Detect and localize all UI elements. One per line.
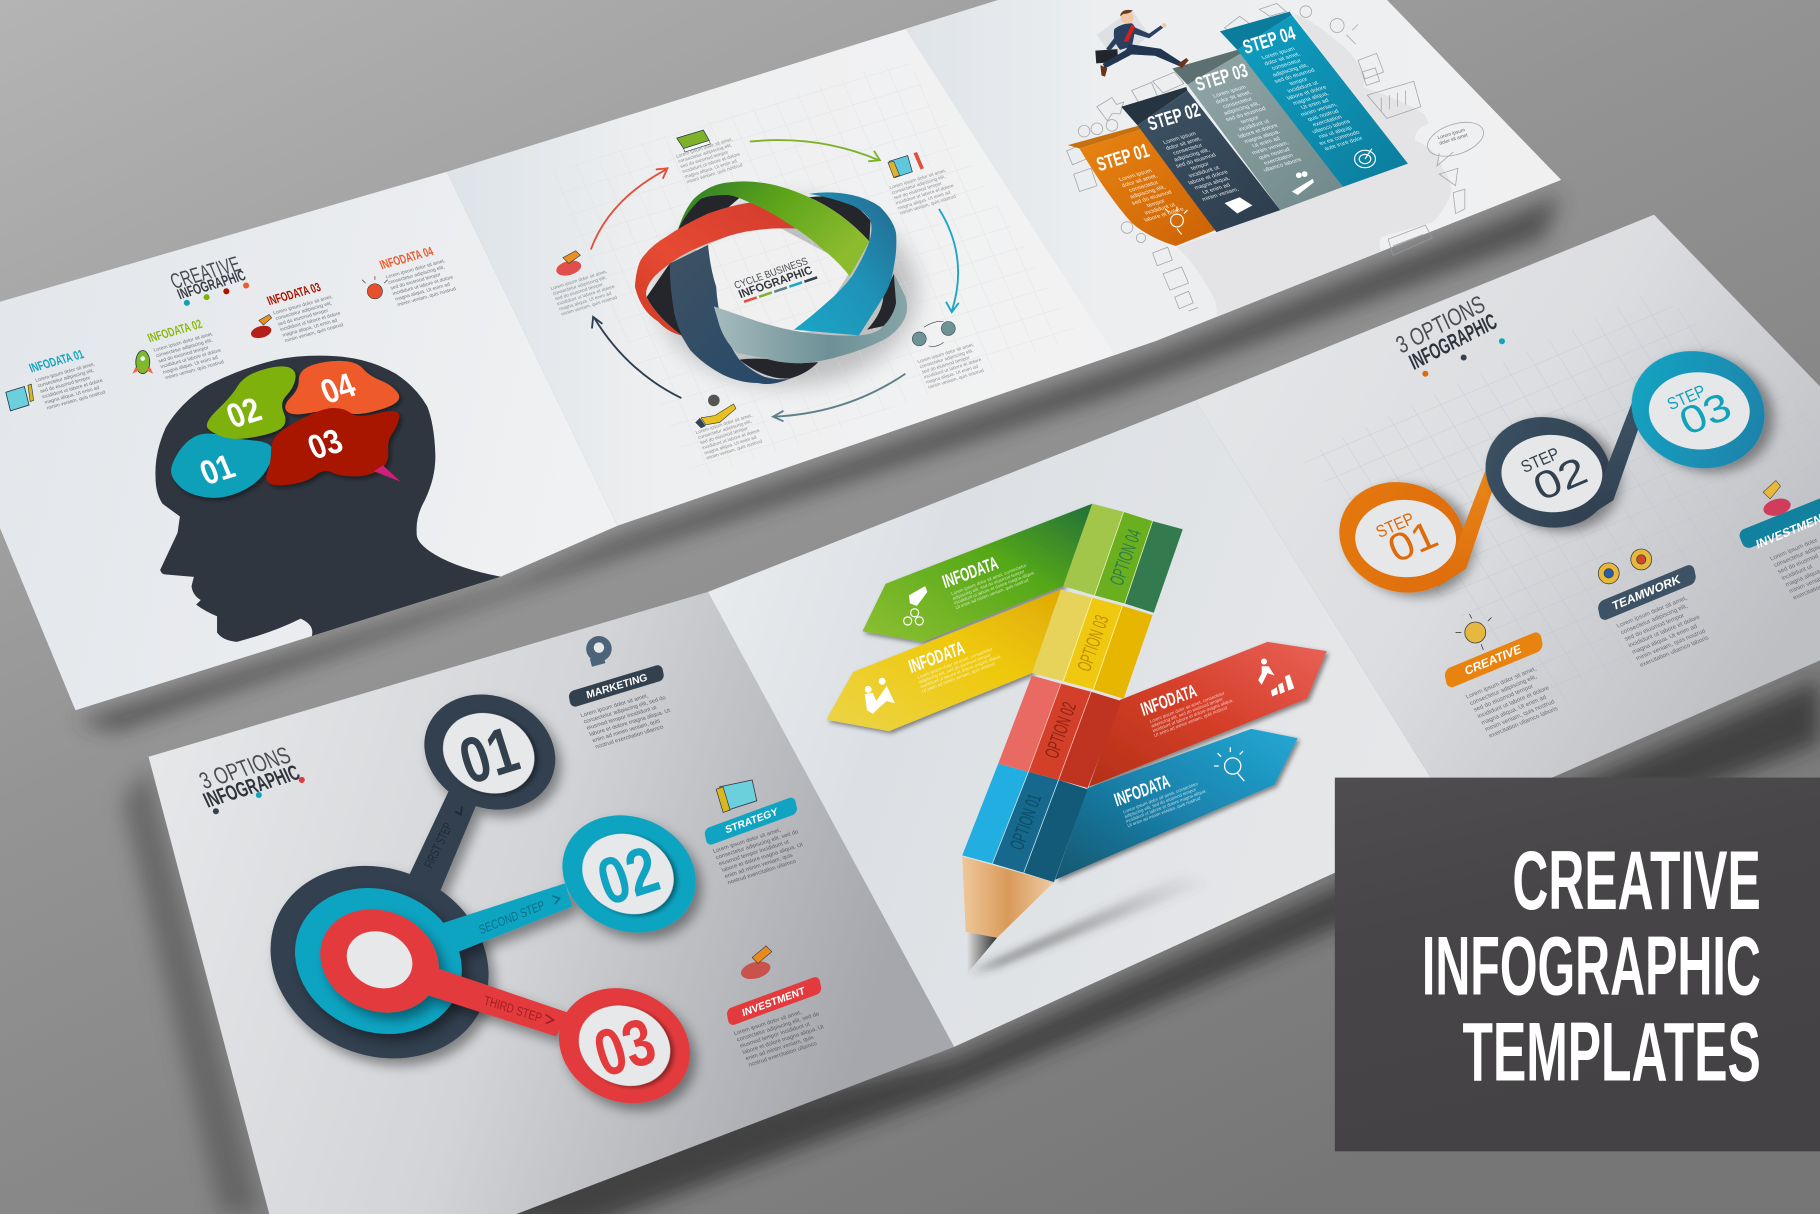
step 03: adipiscing elit,: [1223, 101, 1262, 117]
step 03: Lorem ipsum: [1212, 85, 1248, 99]
step 04: [1220, 12, 1408, 187]
ring inner darks: [647, 194, 905, 379]
step 03: minim veniam,: [1251, 140, 1291, 156]
lobe 01: [173, 435, 271, 496]
text block: heads: incididunt ut labore et dolore: [923, 357, 983, 380]
icon: piggy and hand: [555, 251, 583, 278]
step 03: ullamco laboris: [1263, 157, 1303, 173]
arrow: blue infodata: INFODATA: [1112, 770, 1172, 810]
arrow: yellow infodata: [826, 590, 1061, 731]
text block: chart: Lorem ipsum dolor sit amet,: [675, 137, 734, 160]
lobe numbers: 04: [315, 367, 362, 411]
heading: creative infographic: INFOGRAPHIC: [175, 267, 248, 303]
ribbon 02 to 03: [1584, 403, 1639, 519]
icon: bulb: [1165, 207, 1187, 234]
text block: ruler: Lorem ipsum dolor sit amet,: [889, 168, 947, 191]
step 02: incididunt ut: [1188, 165, 1221, 179]
icon: teamwork heads: [1598, 549, 1652, 584]
step 01: consectetur: [1128, 180, 1160, 194]
investment text: sed do eiusmod: [1776, 553, 1820, 575]
infodata 02: consectetur adipiscing elit,: [155, 338, 214, 359]
text block: gear hand: sed do eiusmod tempor: [699, 426, 749, 446]
creative text: consectetur adipiscing elit,: [1468, 673, 1538, 707]
red node group: [300, 896, 712, 1118]
infodata 01: INFODATA 01: [27, 346, 86, 375]
strategy pill: STRATEGY: [724, 807, 779, 837]
strategy pill: [704, 796, 798, 846]
arrow: yellow infodata: Lorem ipsum dolor sit amet, consectetur: [917, 646, 994, 680]
creative text: magna aliqua. Ut enim ad: [1480, 694, 1548, 726]
text block: piggy: magna aliqua. Ut enim ad: [558, 291, 613, 312]
step 01: STEP 01: [1094, 140, 1152, 176]
ring shadow: [657, 200, 917, 385]
ring: step 03: STEP: [1664, 381, 1709, 414]
step 02: magna aliqua.: [1193, 176, 1232, 191]
marketing text: Lorem ipsum dolor sit amet,: [580, 693, 650, 719]
icon: hand and gears: [904, 586, 927, 625]
step 04: consectetur: [1271, 58, 1303, 72]
pencil segment: blue, option 01: OPTION 01: [1006, 791, 1046, 853]
step 02: [1121, 87, 1280, 232]
title text: [1422, 833, 1761, 1099]
step 02: tempor: [1190, 162, 1211, 172]
red band: [635, 202, 801, 335]
heading: [1392, 291, 1505, 377]
infodata 03: consectetur adipiscing elit,: [275, 301, 333, 322]
infodata 04: magna aliqua. Ut enim ad: [394, 282, 451, 303]
teamwork text: incididunt ut labore et dolore: [1627, 614, 1702, 649]
infodata 02: minim veniam, quis nostrud: [164, 359, 225, 381]
ring: step 01: STEP: [1373, 508, 1417, 542]
step 03: [1172, 50, 1343, 210]
pencil tip: wood: [962, 857, 1054, 938]
strategy text: consectetur adipiscing elit, sed do: [715, 829, 799, 861]
arrow: yellow infodata: Ut enim ad minim veniam, quis nostrud: [921, 661, 996, 694]
step 04: exercitation: [1312, 115, 1343, 128]
icon: investment pig and hand: [1761, 480, 1793, 519]
creative pill: CREATIVE: [1464, 642, 1522, 678]
step 04: minim veniam,: [1300, 102, 1339, 118]
infodata 04: INFODATA 04: [377, 243, 435, 272]
marketing pill: [568, 664, 665, 708]
heading: INFOGRAPHIC: [1405, 308, 1501, 375]
ring: step 02: STEP: [1518, 443, 1562, 477]
step 03: quis nostrud: [1258, 147, 1292, 161]
arrow: yellow infodata: incididunt ut labore et dolore magna aliqua.: [920, 653, 1002, 689]
investment text: labore et dolore magna aliqua. Ut: [742, 1024, 825, 1056]
circle 02 inner: [567, 823, 689, 925]
third step label: THIRD STEP: [482, 993, 544, 1025]
infodata 03: magna aliqua. Ut enim ad: [282, 318, 339, 339]
arrow: blue infodata: [1055, 729, 1298, 880]
creative text: sed do eiusmod tempor: [1472, 683, 1535, 713]
step 04: nisi ut aliquip: [1318, 125, 1353, 140]
heading: 3 OPTIONS: [1392, 291, 1489, 359]
arrow: red infodata: INFODATA: [1138, 680, 1199, 720]
teamwork pill: TEAMWORK: [1611, 572, 1681, 613]
infodata 01: sed do eiusmod tempor: [39, 375, 92, 395]
step 04: Lorem ipsum: [1261, 46, 1296, 61]
marketing text: enim ad minim veniam, quis: [592, 718, 662, 744]
arrow: slate: [773, 374, 905, 421]
infodata 03: incididunt ut labore et dolore: [279, 311, 342, 333]
pencil segment: green, option 04: OPTION 04: [1106, 526, 1146, 588]
text block: chart: sed do eiusmod tempor: [679, 149, 730, 170]
navy node group: [234, 679, 577, 1084]
step 03: incididunt ut: [1238, 119, 1271, 133]
strategy text: nostrud exercitation ullamco: [727, 859, 797, 886]
teal node group: [267, 800, 718, 1053]
step 04: magna aliqua.: [1292, 91, 1331, 107]
infodata 03: INFODATA 03: [265, 279, 323, 308]
step 01: dolor sit amet,: [1121, 173, 1159, 189]
step 04: adipiscing elit,: [1272, 63, 1310, 78]
creative pill: [1444, 630, 1544, 689]
pencil segment: red, option 02: [998, 675, 1121, 788]
teamwork text: minim veniam, quis nostrud: [1635, 628, 1707, 662]
step 02: consectetur: [1172, 143, 1204, 157]
creative text: incididunt ut labore et dolore: [1476, 684, 1551, 720]
step 03: labore et dolore: [1237, 123, 1279, 140]
icon: note and pencil: [6, 384, 34, 411]
arrow: green infodata: incididunt ut labore et dolore magna aliqua.: [954, 570, 1035, 606]
lobe numbers: 01: [195, 448, 240, 493]
arrow: blue infodata: Lorem ipsum dolor sit amet, consectetur: [1122, 781, 1199, 815]
infodata 01: minim veniam, quis nostrud: [46, 389, 107, 411]
icon: marketing head: [586, 636, 612, 667]
arrow: green infodata: INFODATA: [940, 552, 1001, 592]
step 01: [1068, 125, 1216, 246]
step 04: sed do eiusmod: [1273, 68, 1316, 85]
pencil segment: yellow, option 03: OPTION 03: [1074, 612, 1114, 674]
heading: 3 OPTIONS: [195, 742, 295, 795]
icon: handshake: [1225, 197, 1252, 214]
step 02: adipiscing elit,: [1173, 148, 1212, 163]
pencil segment: yellow, option 03: [1032, 590, 1153, 699]
marketing text: nostrud exercitation ullamco: [594, 725, 665, 750]
head cutout: [1177, 13, 1451, 320]
text block: heads: Lorem ipsum dolor sit amet,: [917, 342, 975, 365]
arrow: navy: [592, 317, 681, 398]
icon: ruler and note: [888, 152, 924, 178]
marketing text: consectetur adipiscing elit, sed do: [583, 695, 667, 725]
teamwork text: sed do eiusmod tempor: [1623, 612, 1686, 643]
text block: gear hand: minim veniam, quis nostrud: [705, 439, 764, 462]
center hole: [336, 924, 423, 996]
green band: [678, 181, 869, 276]
grid: [1300, 290, 1820, 708]
infodata 04: [377, 243, 459, 308]
step 04: labore et dolore: [1286, 85, 1328, 101]
bottom sheet: three options page: [149, 592, 954, 1214]
heading: creative infographic: [166, 251, 249, 306]
ring interior: [685, 221, 853, 342]
arrow: green infodata: Lorem ipsum dolor sit amet, consectetur: [951, 562, 1027, 596]
lobe numbers: 03: [303, 423, 348, 467]
icon: two heads: [912, 321, 955, 347]
creative text: exercitation ullamco laboris: [1488, 705, 1559, 739]
step 01: Lorem ipsum: [1118, 168, 1154, 183]
arrow: green infodata: Ut enim ad minim veniam, quis nostrud: [955, 577, 1030, 610]
arrow: red: [591, 168, 667, 250]
step 02: STEP 02: [1145, 99, 1203, 136]
investment text: enim ad minim veniam, quis: [745, 1035, 815, 1062]
bottom sheet: steps page: [1196, 215, 1820, 819]
text block: piggy: incididunt ut labore et dolore: [556, 284, 616, 307]
infodata 01: consectetur adipiscing elit,: [37, 368, 95, 389]
investment text: nostrud exercitation ullamco: [748, 1041, 818, 1068]
text block: piggy: minim veniam, quis nostrud: [560, 295, 618, 318]
text block: heads: magna aliqua. Ut enim ad: [925, 364, 980, 386]
pencil tip: lead: [966, 932, 997, 973]
lobe 02: [209, 368, 294, 437]
creative text: minim veniam, quis nostrud: [1484, 699, 1556, 733]
lobe 03: [268, 410, 398, 484]
investment pill: INVESTMENT: [741, 986, 807, 1019]
title overlay: [1335, 778, 1820, 1151]
arrow: green: [750, 140, 880, 161]
speech bubble: Lorem ipsum: [1437, 127, 1466, 141]
icon: handshake people: [865, 678, 895, 714]
icon: gear hand: [695, 395, 736, 428]
text block: heads: sed do eiusmod tempor: [921, 355, 971, 375]
icon: bulb: [362, 276, 388, 299]
ring: step 01: [1316, 464, 1493, 611]
marketing pill: MARKETING: [586, 672, 648, 702]
step 01: labore et dolore: [1143, 207, 1185, 223]
lobe 04: [287, 363, 397, 413]
infodata 02: sed do eiusmod tempor: [157, 345, 210, 365]
strategy text: eiusmod tempor incididunt ut: [718, 839, 791, 867]
arrow: blue infodata: adipiscing elit, sed do eiusmod tempor: [1124, 787, 1197, 819]
arrow: blue infodata: incididunt ut labore et dolore magna aliqua.: [1125, 788, 1207, 824]
text block: chart: minim veniam, quis nostrud: [686, 162, 744, 185]
second step label: SECOND STEP: [477, 897, 546, 937]
investment text: eiusmod tempor incididunt ut: [739, 1022, 812, 1050]
icon: rocket: [132, 351, 153, 374]
text block: chart: magna aliqua. Ut enim ad: [684, 158, 738, 180]
circle 01 inner: [428, 703, 550, 804]
infodata 01: magna aliqua. Ut enim ad: [44, 385, 101, 406]
arrow: red infodata: [1089, 642, 1327, 787]
icon: chart screen: [677, 130, 710, 152]
text block: piggy: Lorem ipsum dolor sit amet,: [550, 269, 608, 292]
investment pill: [1740, 498, 1820, 548]
step 04: aute irure dolor: [1323, 136, 1364, 152]
ring: step 01: 01: [1381, 512, 1445, 571]
infodata 04: incididunt ut labore et dolore: [392, 275, 455, 297]
infodata 02: incididunt ut labore et dolore: [160, 348, 222, 370]
teamwork text: Lorem ipsum dolor sit amet,: [1616, 595, 1689, 630]
infodata 01: Lorem ipsum dolor sit amet,: [34, 362, 96, 384]
infodata 03: Lorem ipsum dolor sit amet,: [272, 294, 334, 316]
arrow: yellow infodata: adipiscing elit, sed do eiusmod tempor: [918, 652, 992, 685]
text block: heads: consectetur adipiscing elit,: [919, 348, 974, 370]
infodata 03: sed do eiusmod tempor: [277, 308, 330, 327]
arrow: yellow infodata: INFODATA: [906, 637, 967, 677]
infodata 02: INFODATA 02: [145, 316, 204, 345]
circle 02 inner: 02: [589, 832, 667, 919]
heading: [195, 742, 305, 814]
text block: ruler: sed do eiusmod tempor: [893, 181, 943, 201]
circle 01 inner: 01: [451, 712, 527, 798]
infodata 04: Lorem ipsum dolor sit amet,: [385, 258, 446, 280]
arrow: red infodata: Ut enim ad minim veniam, quis nostrud: [1153, 705, 1228, 738]
ring: step 03: 03: [1673, 384, 1738, 444]
step 04: ex ea commodo: [1318, 130, 1361, 147]
teamwork text: magna aliqua. Ut enim ad: [1631, 623, 1699, 656]
top sheet: cycle page: [447, 0, 1158, 526]
teamwork pill: [1597, 563, 1697, 622]
step 03: exercitation: [1263, 153, 1295, 166]
arrow: green infodata: adipiscing elit, sed do eiusmod tempor: [952, 568, 1025, 601]
icon: target: [1355, 149, 1375, 168]
arrow: blue infodata: Ut enim ad minim veniam, quis nostrud: [1127, 795, 1201, 828]
pencil segment: blue, option 01: [962, 764, 1088, 882]
text block: gear hand: incididunt ut labore et dolore: [701, 428, 761, 451]
step 02: labore et dolore: [1187, 170, 1230, 186]
infodata 02: Lorem ipsum dolor sit amet,: [153, 331, 214, 354]
investment text: consectetur adipiscing elit, sed do: [736, 1011, 820, 1043]
step 04: tempor: [1289, 77, 1309, 87]
marketing text: eiusmod tempor incididunt ut: [586, 705, 658, 732]
strategy text: labore et dolore magna aliqua. Ut: [721, 842, 805, 874]
text block: chart: consectetur adipiscing elit,: [677, 143, 733, 165]
step 01: sed do eiusmod: [1131, 190, 1173, 207]
text block: ruler: minim veniam, quis nostrud: [899, 194, 957, 217]
icon: strategy note: [716, 780, 757, 812]
step 03: Ut enim ad: [1251, 136, 1282, 149]
icon: light bulb: [1214, 747, 1244, 781]
slate band: [714, 274, 907, 363]
strategy text: Lorem ipsum dolor sit amet,: [712, 828, 782, 855]
pencil shadow: [970, 873, 1207, 973]
step 01: adipiscing elit,: [1129, 185, 1168, 200]
marketing text: labore et dolore magna aliqua. Ut: [589, 708, 672, 738]
text block: ruler: magna aliqua. Ut enim ad: [897, 190, 952, 212]
text block: heads: minim veniam, quis nostrud: [927, 368, 985, 391]
creative text: Lorem ipsum dolor sit amet,: [1465, 666, 1538, 700]
icon: investment pig: [739, 946, 772, 982]
infodata 01: [27, 346, 109, 411]
top sheet: steps page: [905, 0, 1561, 355]
ring infographic: [635, 181, 907, 384]
heading: creative infographic: CREATIVE: [166, 251, 244, 294]
infodata 04: minim veniam, quis nostrud: [396, 286, 457, 308]
top sheet: head page: [0, 172, 618, 710]
doodles: [1067, 3, 1488, 311]
lobe numbers: [195, 367, 362, 493]
lobe numbers: 02: [221, 391, 267, 436]
icon: runner on bars: [1258, 659, 1294, 696]
navy band: [670, 245, 790, 384]
arrow: red infodata: adipiscing elit, sed do eiusmod tempor: [1151, 696, 1224, 729]
arrow: red infodata: Lorem ipsum dolor sit amet, consectetur: [1149, 690, 1226, 724]
circle 03 inner: 03: [585, 1003, 664, 1091]
step 02: sed do eiusmod: [1175, 153, 1218, 169]
cycle heading: CYCLE BUSINESS: [733, 256, 810, 292]
step 01: incididunt ut: [1144, 202, 1177, 216]
ribbon 01 to 02: [1437, 467, 1493, 587]
step 04: incididunt ut: [1286, 81, 1320, 94]
step 04: dolor sit amet,: [1263, 52, 1302, 67]
infodata 04: consectetur adipiscing elit,: [387, 265, 446, 286]
text block: piggy: sed do eiusmod tempor: [554, 282, 604, 302]
brain lobes: [173, 363, 398, 496]
heading: INFOGRAPHIC: [199, 760, 304, 812]
step 03: STEP 03: [1193, 60, 1251, 96]
strategy text: enim ad minim veniam, quis: [724, 853, 794, 880]
step 03: dolor sit amet,: [1215, 90, 1253, 105]
arrow: red infodata: incididunt ut labore et dolore magna aliqua.: [1152, 697, 1234, 733]
step 02: Lorem ipsum: [1162, 131, 1198, 146]
investment text: Lorem ipsum dolor: [1769, 537, 1819, 562]
step 01: tempor: [1146, 199, 1167, 209]
bottom sheet: pencil page: [708, 400, 1457, 1047]
teamwork text: consectetur adipiscing elit,: [1619, 603, 1689, 636]
pencil segment: red, option 02: OPTION 02: [1041, 699, 1081, 761]
text block: gear hand: Lorem ipsum dolor sit amet,: [695, 413, 753, 436]
first step label: FIRST STEP: [421, 820, 455, 870]
infodata 03: minim veniam, quis nostrud: [284, 322, 345, 344]
ring: step 02: [1463, 399, 1639, 546]
infodata 02: [145, 316, 227, 381]
ring: step 03: [1607, 332, 1789, 487]
infodata 03: [265, 279, 347, 344]
circle 03 inner: [563, 995, 685, 1096]
head silhouette: [155, 356, 501, 650]
icon: creative bulb: [1456, 614, 1492, 650]
text block: piggy: consectetur adipiscing elit,: [552, 275, 608, 297]
blue band: [794, 192, 896, 335]
cycle heading: INFOGRAPHIC: [737, 264, 815, 301]
step 03: sed do eiusmod: [1225, 106, 1267, 123]
step 02: Ut enim ad: [1201, 183, 1232, 196]
brain stem: [374, 465, 400, 482]
teamwork text: exercitation ullamco laboris: [1638, 635, 1710, 669]
step 04: quis nostrud: [1307, 109, 1340, 123]
step 04: Ut enim ad: [1300, 98, 1330, 111]
step 03: consectetur: [1222, 97, 1254, 110]
ring: step 02: 02: [1526, 449, 1594, 509]
investment text: Lorem ipsum dolor sit amet,: [733, 1010, 803, 1037]
text block: chart: incididunt ut labore et dolore: [682, 152, 741, 175]
step 04: STEP 04: [1240, 23, 1298, 59]
icon: piggy bank: [250, 315, 273, 340]
investment text: incididunt ut: [1780, 563, 1814, 582]
step 04: ullamco laboris: [1311, 119, 1352, 135]
infodata 02: magna aliqua. Ut enim ad: [162, 355, 219, 376]
step 02: minim veniam,: [1201, 187, 1241, 203]
infodata 04: sed do eiusmod tempor: [390, 272, 442, 291]
arrow: green infodata: [862, 504, 1092, 642]
pencil segment: green, option 04: [1063, 504, 1183, 613]
step 03: tempor: [1240, 115, 1261, 125]
text block: gear hand: magna aliqua. Ut enim ad: [703, 435, 758, 456]
text block: ruler: consectetur adipiscing elit,: [891, 174, 947, 196]
arrow: blue: [939, 209, 959, 312]
step 03: magna aliqua.: [1243, 129, 1282, 145]
speech bubble: dolor sit amet: [1439, 132, 1469, 147]
text block: gear hand: consectetur adipiscing elit,: [697, 419, 753, 441]
infodata 01: incididunt ut labore et dolore: [41, 378, 104, 400]
text block: ruler: incididunt ut labore et dolore: [895, 183, 955, 206]
investment pill: [726, 976, 822, 1027]
step 02: dolor sit amet,: [1165, 136, 1204, 152]
icon: hand with gears: [1292, 171, 1314, 195]
runner: [1095, 9, 1189, 77]
